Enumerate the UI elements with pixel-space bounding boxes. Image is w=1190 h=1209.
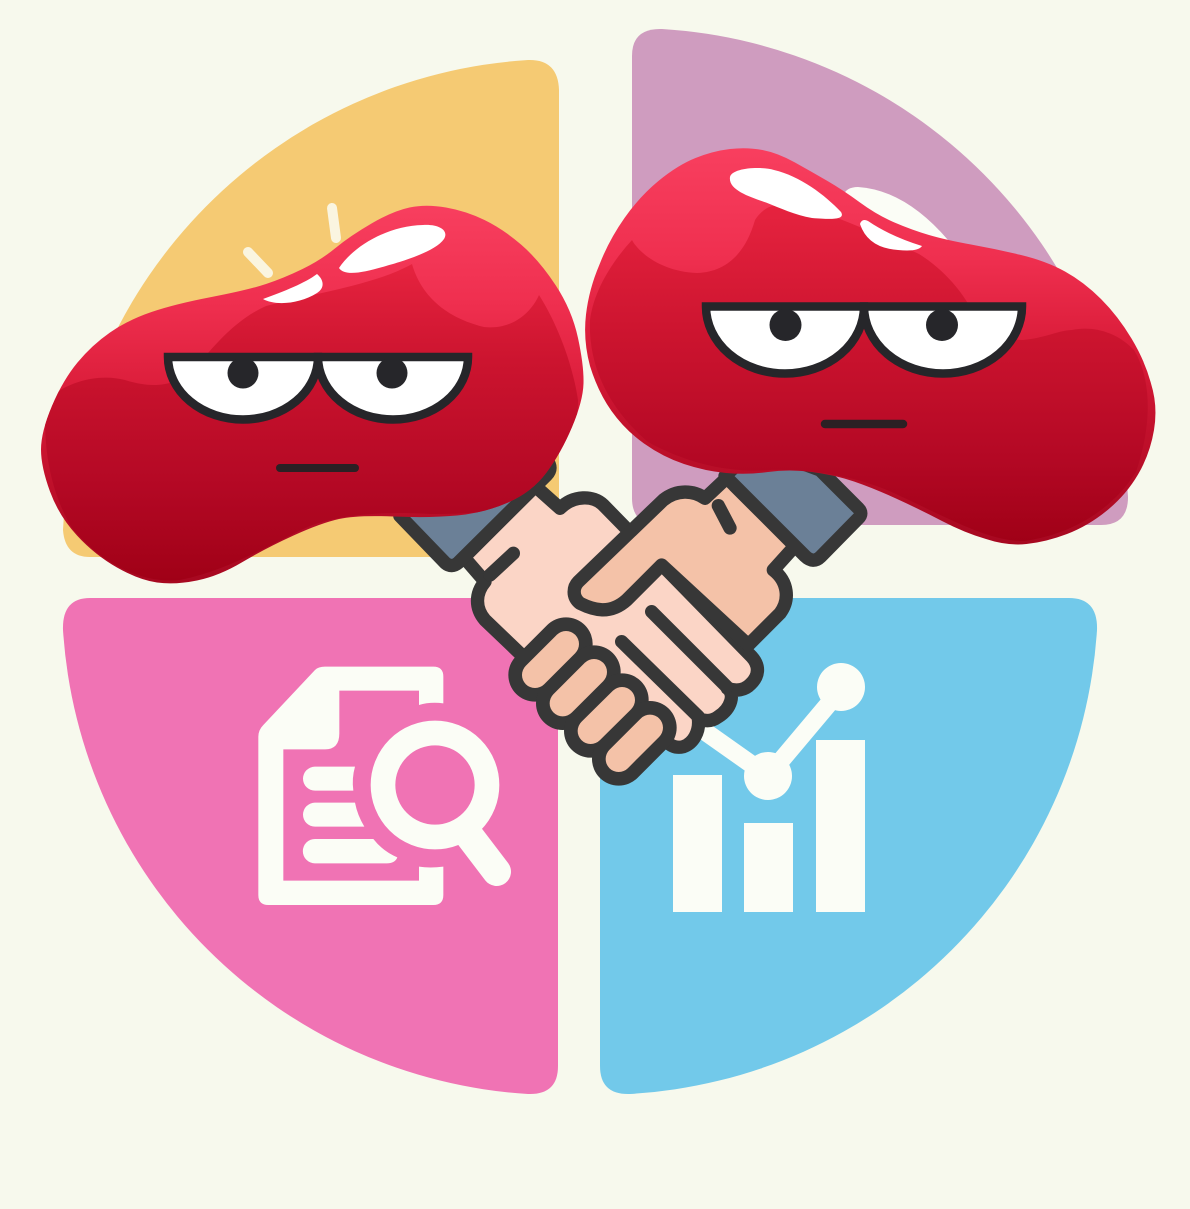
- blob inner shade: [45, 264, 578, 580]
- blob body: [41, 206, 584, 583]
- blob body: [585, 148, 1155, 544]
- left sleeve: [400, 440, 550, 566]
- highlight large: [730, 168, 842, 219]
- left hand: [464, 486, 757, 747]
- icon: document with magnifier: [258, 667, 497, 905]
- right hand: [574, 477, 795, 645]
- mouth: [280, 464, 355, 472]
- panel: pink quadrant: [63, 598, 558, 1094]
- highlight small: [860, 220, 922, 250]
- gripping fingers fill: [535, 644, 650, 759]
- highlight large: [339, 225, 445, 273]
- character: right red blob: [585, 148, 1155, 544]
- icon: bar chart with trend line: [673, 663, 865, 912]
- panel: blue quadrant: [600, 598, 1097, 1094]
- icon: handshake: [400, 440, 861, 759]
- highlight small: [263, 274, 323, 303]
- mouth: [825, 420, 903, 428]
- right sleeve: [725, 447, 861, 560]
- character: left red blob: [41, 206, 584, 583]
- panel: purple quadrant: [632, 29, 1128, 525]
- eyes: [706, 306, 1022, 374]
- panel: yellow quadrant: [63, 60, 559, 557]
- finger separators: [622, 612, 727, 717]
- eyes: [168, 357, 468, 420]
- thumb crease: [718, 506, 730, 528]
- pupils: [770, 309, 958, 341]
- gripping fingers outline: [535, 644, 650, 759]
- pupils: [228, 358, 408, 388]
- left hand crease: [490, 553, 513, 575]
- icon: white shape peeking behind blob: [843, 187, 948, 300]
- icon: spark marks: [248, 208, 336, 273]
- blob inner shade: [590, 206, 1148, 541]
